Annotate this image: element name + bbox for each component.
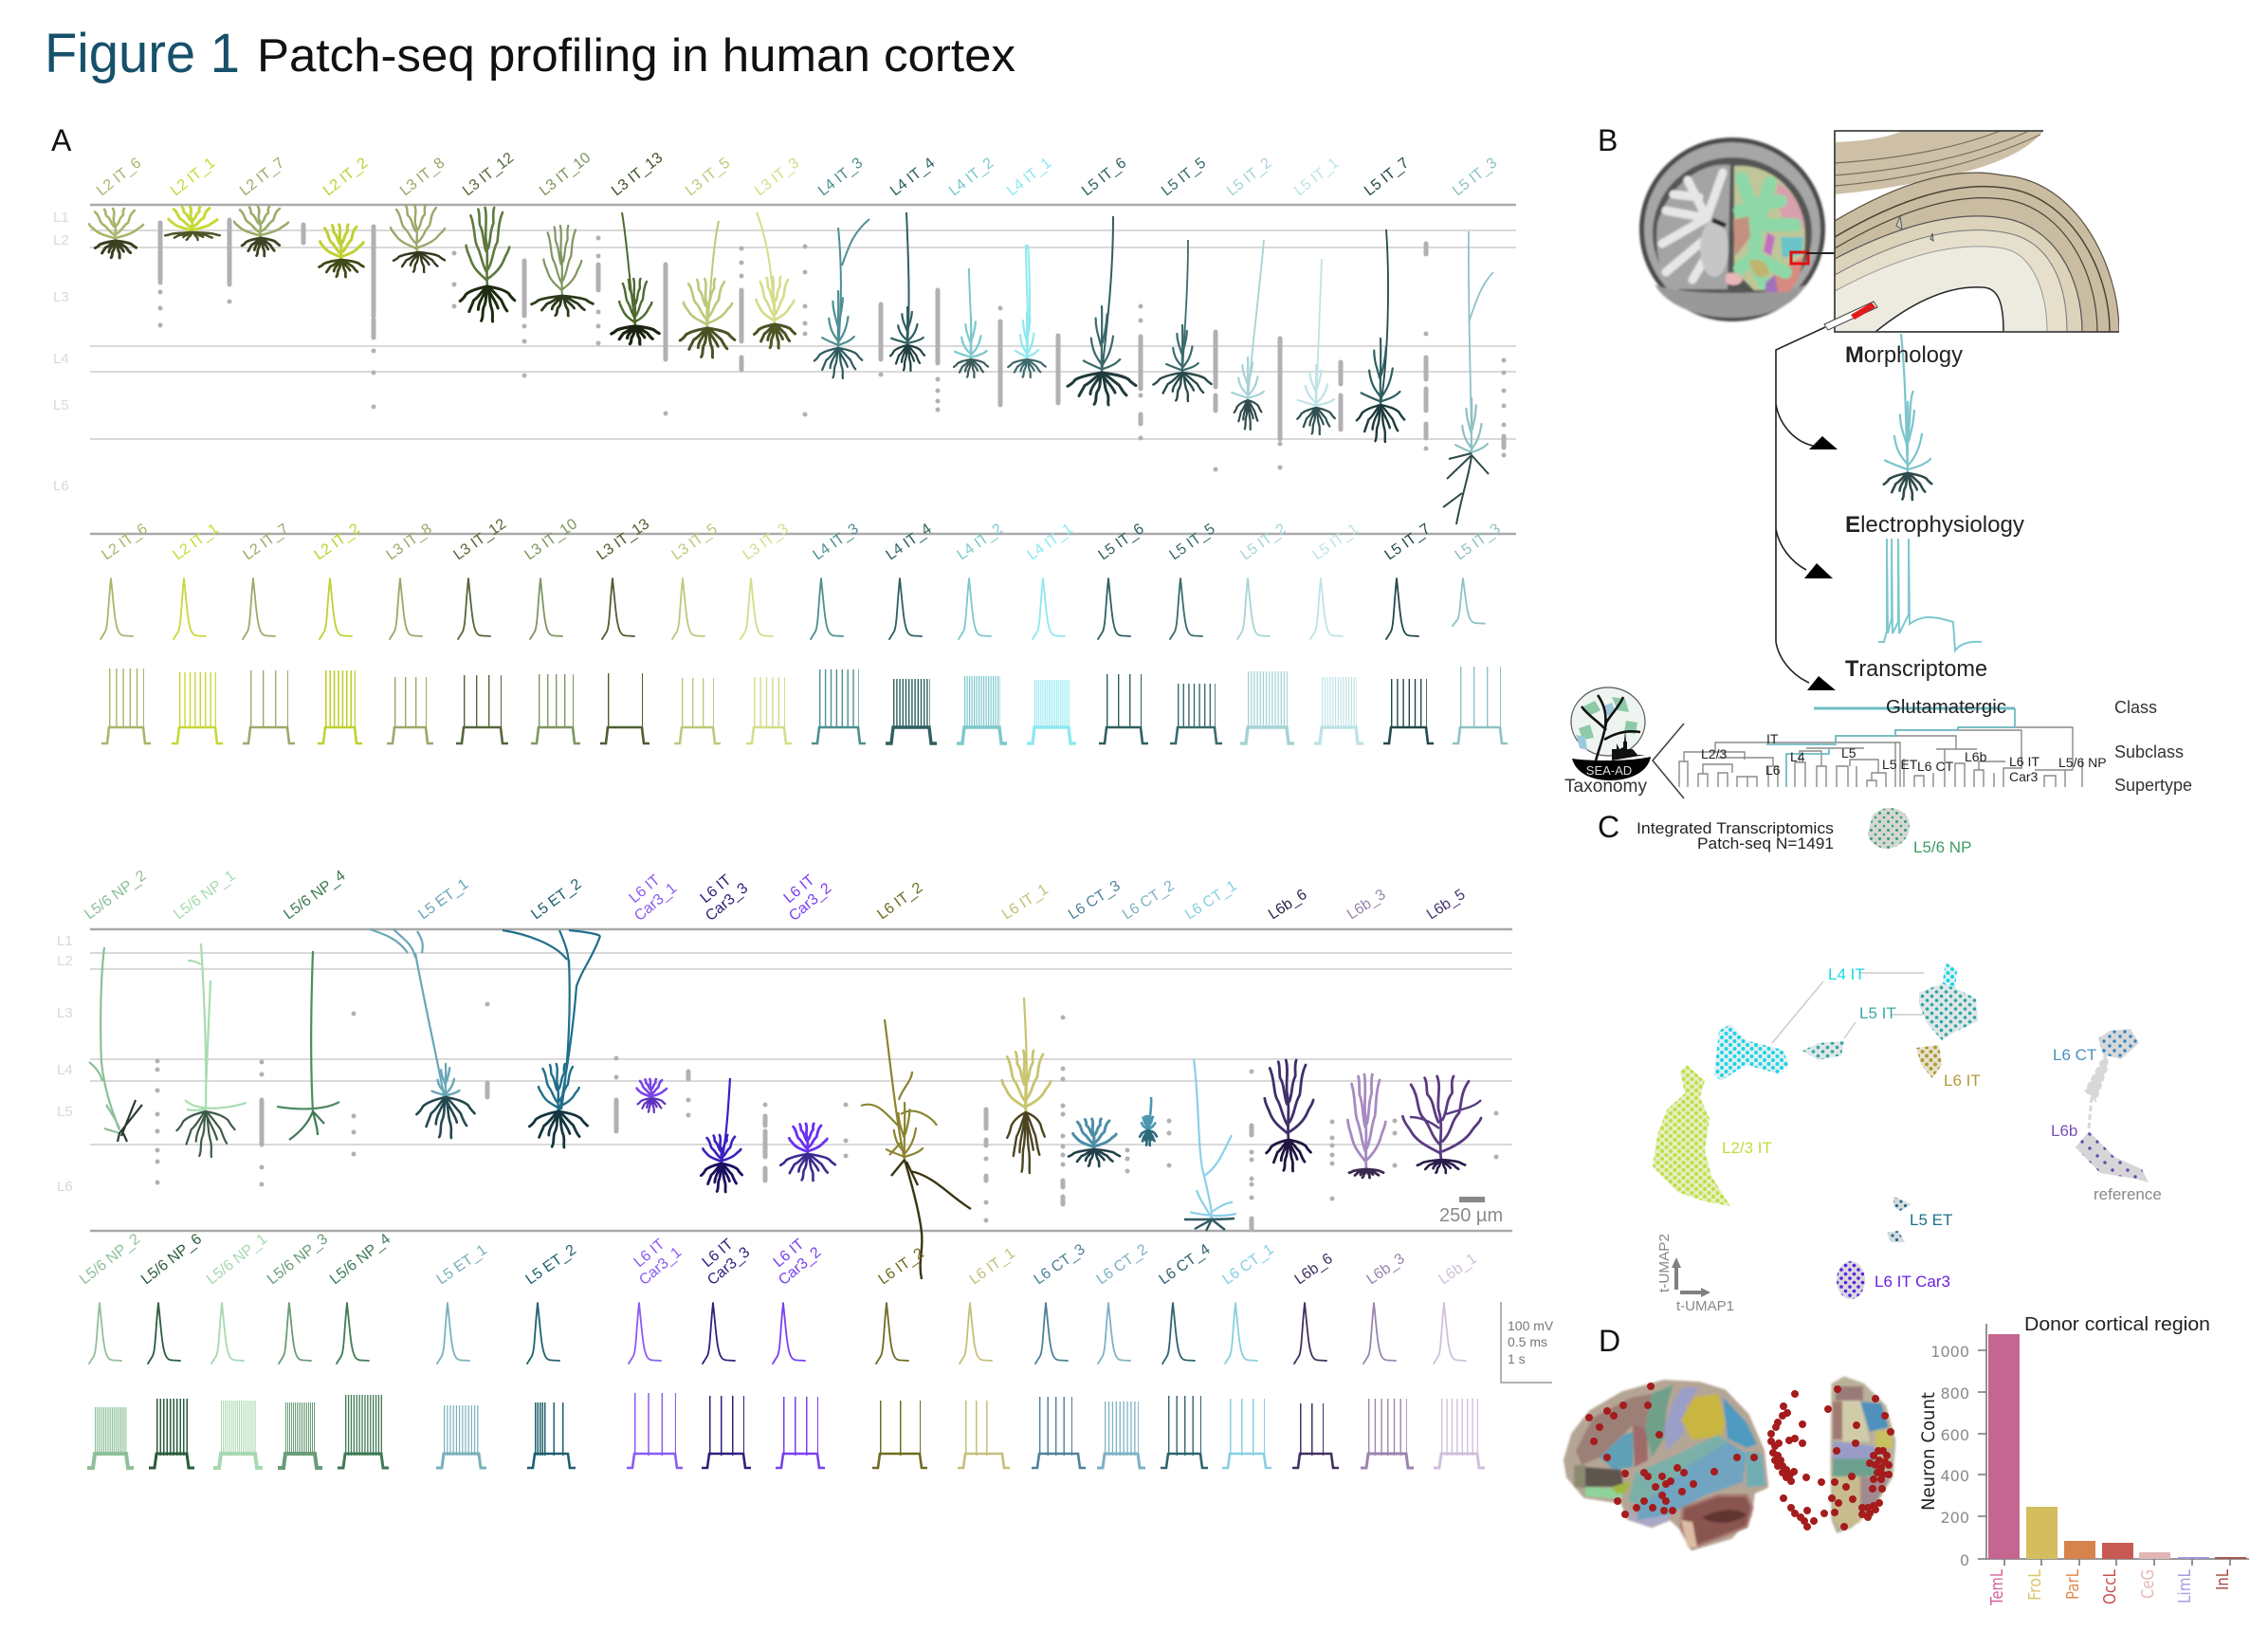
x tick labels: LimL <box>2175 1569 2195 1604</box>
panel A upper: electrophysiology type labels: L5 IT_1 <box>1310 521 1362 563</box>
panel A upper: electrophysiology type labels: L2 IT_6 <box>100 521 151 563</box>
panel C: UMAP axes: t-UMAP1 <box>1676 1298 1734 1314</box>
panel C: cluster labels: L6b <box>2051 1122 2077 1140</box>
panel C: cluster labels <box>1722 838 2162 1291</box>
panel A upper: morphology type labels: L3 IT_12 <box>460 150 517 199</box>
y tick labels: 800 <box>1940 1384 1969 1402</box>
panel A upper: electrophysiology type labels: L5 IT_5 <box>1167 521 1218 563</box>
panel B: coronal brain MRI <box>1639 137 1825 321</box>
panel A lower: electrophysiology type labels: Car3_1 <box>636 1244 685 1289</box>
dendrogram labels: L5 <box>1841 745 1856 761</box>
y axis title: Neuron Count <box>1918 1392 1939 1511</box>
dendrogram labels: IT <box>1766 731 1779 746</box>
y tick labels: 1000 <box>1930 1343 1969 1361</box>
panel A lower: layer names <box>57 933 73 1195</box>
panel A upper: morphology type labels: L5 IT_5 <box>1159 155 1209 199</box>
neuron L6 IT Car3_2 <box>780 1124 835 1181</box>
panel A lower: electrophysiology type labels: Car3_2 <box>776 1244 824 1289</box>
panel A lower: electrophysiology type labels: L6 CT_2 <box>1094 1241 1151 1288</box>
panel A lower: morphology type labels: L6 IT_2 <box>874 880 925 923</box>
electrophysiology scale legend <box>1501 1302 1554 1383</box>
panel A upper: spike trains <box>101 697 1508 743</box>
neuron L2 IT_2 <box>320 225 363 277</box>
panel A lower: electrophysiology type labels <box>77 1231 1480 1289</box>
panel C: cluster labels: L6 CT <box>2053 1046 2096 1064</box>
panel A lower: morphology type labels: L6b_3 <box>1344 887 1389 923</box>
taxonomy level labels: Class <box>2114 698 2157 717</box>
panel A lower: layer lines <box>90 929 1512 1231</box>
x tick labels: ParL <box>2063 1569 2083 1600</box>
panel A upper: electrophysiology type labels: L4 IT_1 <box>1025 521 1076 563</box>
cluster L2/3 IT <box>1653 1065 1730 1206</box>
panel A lower: electrophysiology type labels: L5/6 NP_1 <box>204 1231 270 1288</box>
panel A lower: action potential traces <box>89 1303 1466 1364</box>
panel A upper: morphology type labels: L3 IT_10 <box>537 150 594 199</box>
panel C: cluster labels: L5/6 NP <box>1913 838 1971 856</box>
panel label A: A <box>51 123 72 157</box>
neuron L2 IT_6 <box>89 209 143 258</box>
panel A lower: layer names: L4 <box>57 1062 73 1078</box>
panel B: cortex inset <box>1835 131 2119 332</box>
panel A upper: morphology type labels: L3 IT_8 <box>397 155 448 199</box>
dendrogram labels: L5 ET <box>1882 757 1918 772</box>
panel A lower: morphology type labels: L5/6 NP_4 <box>281 868 349 923</box>
panel A upper: electrophysiology type labels: L5 IT_7 <box>1382 521 1434 563</box>
panel A upper: electrophysiology type labels: L2 IT_1 <box>171 521 222 563</box>
panel A lower: electrophysiology type labels: L5/6 NP_3 <box>265 1231 331 1288</box>
panel C: cluster labels: L6 IT Car3 <box>1875 1273 1950 1291</box>
panel A upper: morphology type labels: L2 IT_2 <box>320 155 371 199</box>
panel A lower: layer names: L3 <box>57 1005 73 1021</box>
panel A lower: electrophysiology type labels: L6 IT_2 <box>876 1245 927 1288</box>
dendrogram labels: L6 IT <box>2009 754 2039 769</box>
panel B: arrow to cortex inset <box>1806 247 1889 262</box>
panel A lower: morphology type labels: L6b_6 <box>1266 887 1310 923</box>
panel A upper: electrophysiology type labels: L5 IT_3 <box>1453 521 1504 563</box>
panel A lower: electrophysiology type labels: L6b_3 <box>1364 1251 1408 1288</box>
taxonomy level labels <box>2114 698 2192 795</box>
panel C: header <box>1637 819 1834 852</box>
title: Patch-seq profiling in human cortex <box>257 30 1015 82</box>
panel A upper: electrophysiology type labels: L3 IT_8 <box>384 521 435 563</box>
panel A upper: electrophysiology type labels: L3 IT_12 <box>451 516 509 563</box>
scale bar 250 um: 250 µm <box>1439 1205 1503 1226</box>
panel B: morphology neuron <box>1884 334 1931 500</box>
panel A upper: electrophysiology type labels: L3 IT_5 <box>669 521 721 563</box>
panel A upper: morphology type labels: L5 IT_2 <box>1224 155 1274 199</box>
panel A upper: morphology type labels: L3 IT_5 <box>683 155 733 199</box>
panel A lower: electrophysiology type labels: L5 ET_1 <box>434 1242 490 1288</box>
panel A lower: morphology type labels: L5 ET_1 <box>415 876 471 923</box>
panel D: recording site dots <box>1589 1386 1891 1527</box>
neuron L5 IT_5 <box>1153 240 1212 401</box>
neuron L6b_5 <box>1402 1076 1481 1173</box>
neuron L4 IT_1 <box>1008 245 1046 377</box>
panel C: UMAP axes <box>1656 1234 1734 1314</box>
panel A upper: layer names: L4 <box>53 351 69 367</box>
panel A lower: electrophysiology type labels: L6 CT_3 <box>1032 1241 1088 1288</box>
panel A upper: morphology type labels <box>94 150 1500 199</box>
neuron L6 CT_2 <box>1140 1097 1157 1145</box>
panel A upper: action potential traces <box>101 578 1485 639</box>
panel A lower: morphology type labels: L6b_5 <box>1424 887 1469 923</box>
panel C: cluster labels: L2/3 IT <box>1722 1139 1772 1157</box>
dendrogram <box>1679 708 2082 787</box>
panel A lower: morphology type labels: L5/6 NP_2 <box>82 868 150 923</box>
neuron L5/6 NP_1 <box>176 944 247 1157</box>
panel A lower: morphology type labels: L6 IT_1 <box>999 881 1052 923</box>
neuron L6 IT Car3_3 <box>701 1078 742 1192</box>
panel A lower: morphology type labels: L6 CT_1 <box>1182 878 1240 923</box>
title: Figure 1 <box>45 23 240 84</box>
panel A lower: electrophysiology type labels: L6 IT <box>700 1236 737 1271</box>
taxonomy wedge <box>1653 724 1684 798</box>
neuron L4 IT_4 <box>890 212 924 371</box>
neuron L2 IT_1 <box>165 207 220 240</box>
panel B: Morphology heading: Morphology <box>1845 342 1963 368</box>
panel A upper: electrophysiology type labels: L4 IT_3 <box>811 521 862 563</box>
panel A upper: soma depth dots <box>160 220 1504 469</box>
cluster L6 IT Car3 <box>1837 1261 1865 1299</box>
neuron L5 ET_2 <box>503 930 600 1147</box>
cluster L6b <box>2076 1131 2149 1182</box>
x tick labels: TemL <box>1987 1569 2007 1606</box>
panel A upper: electrophysiology type labels: L3 IT_10 <box>522 516 580 563</box>
panel A upper: electrophysiology type labels: L2 IT_7 <box>241 521 292 563</box>
panel A upper: morphology type labels: L3 IT_13 <box>609 150 666 199</box>
neuron L5/6 NP_2 <box>89 947 142 1142</box>
panel A upper: electrophysiology type labels: L2 IT_2 <box>312 521 363 563</box>
panel A upper: layer names: L1 <box>53 210 69 226</box>
panel A lower: morphology type labels: L6 IT <box>698 871 735 907</box>
panel label B: B <box>1598 123 1618 157</box>
neuron L5 IT_2 <box>1232 240 1264 430</box>
dendrogram labels: L2/3 <box>1701 746 1727 761</box>
panel D: bar chart Donor cortical region <box>1918 1314 2249 1606</box>
panel A upper: morphology type labels: L4 IT_4 <box>887 155 938 199</box>
panel A lower: morphology type labels: L6 IT <box>627 871 664 907</box>
panel A lower: layer names: L5 <box>57 1104 73 1120</box>
panel A lower: layer names: L2 <box>57 953 73 969</box>
panel A lower: electrophysiology type labels: L6 IT <box>631 1236 668 1271</box>
panel A lower: electrophysiology type labels: L6 CT_1 <box>1220 1241 1277 1288</box>
neuron L3 IT_10 <box>532 226 593 316</box>
neuron L6b_3 <box>1347 1074 1385 1178</box>
panel A upper: layer names: L6 <box>53 478 69 494</box>
neuron L6b_6 <box>1265 1060 1313 1171</box>
neuron L6 IT_2 <box>861 1019 971 1279</box>
panel A lower: morphology type labels: Car3_1 <box>631 880 680 925</box>
panel A upper: electrophysiology type labels <box>100 516 1504 563</box>
neuron L2 IT_7 <box>234 207 288 256</box>
neuron L4 IT_2 <box>954 268 988 377</box>
panel A lower: morphology type labels: L6 CT_2 <box>1120 878 1178 923</box>
neuron L5 IT_7 <box>1357 229 1404 442</box>
panel label C: C <box>1598 810 1619 844</box>
panel B: Transcriptome heading: Transcriptome <box>1845 656 1987 682</box>
dendrogram labels: L4 <box>1790 749 1805 764</box>
Taxonomy label: Taxonomy <box>1564 777 1647 797</box>
neuron L5 IT_3 <box>1443 231 1493 524</box>
x tick labels: InL <box>2213 1569 2233 1590</box>
reference tail <box>2086 1053 2107 1128</box>
panel A upper: electrophysiology type labels: L5 IT_6 <box>1096 521 1147 563</box>
panel A upper: electrophysiology type labels: L5 IT_2 <box>1238 521 1289 563</box>
panel A lower: neuron morphologies <box>89 929 1481 1279</box>
panel A lower: morphology type labels: Car3_3 <box>703 880 751 925</box>
panel A lower: electrophysiology type labels: L6 IT_1 <box>967 1245 1018 1288</box>
panel A upper: neuron morphologies <box>89 205 1493 524</box>
panel A lower: electrophysiology type labels: L5/6 NP_6 <box>138 1231 205 1288</box>
cluster L5/6 NP <box>1868 808 1910 849</box>
dendrogram labels: Glutamatergic <box>1886 697 2006 718</box>
panel A lower: electrophysiology type labels: L6b_6 <box>1292 1251 1336 1288</box>
dendrogram labels <box>1701 697 2107 784</box>
panel C: cluster labels: reference <box>2094 1185 2162 1203</box>
panel C: cluster labels: L5 ET <box>1910 1211 1952 1229</box>
panel A upper: electrophysiology type labels: L3 IT_3 <box>741 521 792 563</box>
title <box>45 23 1015 84</box>
panel A lower: electrophysiology type labels: L5/6 NP_4 <box>327 1231 393 1288</box>
y axis <box>1978 1324 2249 1566</box>
icon: SEA-AD taxonomy tree logo <box>1571 687 1651 780</box>
panel A lower: electrophysiology type labels: L6 CT_4 <box>1157 1241 1214 1288</box>
neuron L3 IT_13 <box>612 212 659 344</box>
panel A lower: layer names: L1 <box>57 933 73 949</box>
cluster L5 ET <box>1887 1197 1911 1242</box>
panel A upper: morphology type labels: L5 IT_1 <box>1291 155 1342 199</box>
dendrogram labels: Car3 <box>2009 769 2039 784</box>
panel A lower: morphology type labels: L6 IT <box>781 871 818 907</box>
panel A upper: morphology type labels: L5 IT_7 <box>1362 155 1412 199</box>
chart title: Donor cortical region <box>2024 1314 2210 1335</box>
cluster L6 CT <box>2098 1029 2139 1059</box>
panel A lower: electrophysiology type labels: Car3_3 <box>704 1244 753 1289</box>
panel C: UMAP clusters <box>1653 808 2149 1299</box>
panel A lower: spike trains <box>87 1424 1485 1468</box>
panel A lower: morphology type labels: L5/6 NP_1 <box>171 868 239 923</box>
neuron L5 IT_1 <box>1297 259 1335 434</box>
x tick labels: FroL <box>2025 1569 2045 1601</box>
panel D: dorsal brain <box>1832 1378 1894 1531</box>
panel A upper: morphology type labels: L2 IT_7 <box>237 155 287 199</box>
panel A upper: layer names <box>53 210 69 494</box>
x tick labels <box>1987 1569 2233 1606</box>
neuron L5/6 NP_4 <box>277 951 339 1140</box>
dendrogram labels: L6 CT <box>1917 759 1954 774</box>
electrophysiology scale legend: 0.5 ms <box>1508 1334 1547 1349</box>
panel A lower: electrophysiology type labels: L6 IT <box>771 1236 808 1271</box>
y tick labels: 200 <box>1940 1509 1969 1527</box>
panel A upper: layer lines <box>90 205 1516 534</box>
panel label D: D <box>1599 1324 1620 1358</box>
y tick labels: 0 <box>1960 1551 1969 1569</box>
icon: SEA-AD taxonomy tree logo: SEA-AD <box>1586 763 1632 778</box>
neuron L3 IT_12 <box>460 208 515 321</box>
panel B: Electrophysiology heading: Electrophysiology <box>1845 512 2024 538</box>
neuron L6 IT Car3_1 <box>637 1079 667 1112</box>
panel C: UMAP axes: t-UMAP2 <box>1656 1234 1673 1292</box>
panel A lower: electrophysiology type labels: L6b_1 <box>1436 1251 1480 1288</box>
panel A upper: layer names: L2 <box>53 232 69 248</box>
panel A lower: electrophysiology type labels: L5/6 NP_2 <box>77 1231 143 1288</box>
panel A upper: electrophysiology type labels: L4 IT_2 <box>955 521 1006 563</box>
panel A lower: electrophysiology type labels: L5 ET_2 <box>523 1242 579 1288</box>
dendrogram labels: L6 <box>1765 762 1781 778</box>
neuron L5 ET_1 <box>370 929 475 1138</box>
neuron L6 IT_1 <box>1002 998 1051 1173</box>
cluster L5 IT small <box>1802 1041 1844 1060</box>
panel B: cortex inset frame <box>1835 131 2119 332</box>
dendrogram labels: L6b <box>1965 749 1987 764</box>
panel A upper: morphology type labels: L5 IT_3 <box>1450 155 1500 199</box>
x tick labels: CeG <box>2138 1569 2158 1599</box>
panel A lower: soma depth dots <box>157 1004 1496 1230</box>
electrophysiology scale legend: 100 mV <box>1508 1318 1554 1333</box>
taxonomy level labels: Subclass <box>2114 742 2184 761</box>
panel A upper: morphology type labels: L4 IT_2 <box>946 155 997 199</box>
neuron L4 IT_3 <box>814 219 869 378</box>
neuron L5 IT_6 <box>1068 216 1136 405</box>
panel B: branching arrows <box>1776 327 1838 690</box>
panel A upper: electrophysiology type labels: L3 IT_13 <box>594 516 652 563</box>
panel A lower: morphology type labels: L5 ET_2 <box>528 876 584 923</box>
y tick labels: 400 <box>1940 1467 1969 1485</box>
neuron L3 IT_8 <box>391 205 445 272</box>
cluster L5 IT large <box>1919 983 1978 1040</box>
panel A upper: layer names: L3 <box>53 289 69 305</box>
neuron L6 CT_3 <box>1069 1119 1120 1166</box>
panel A upper: morphology type labels: L5 IT_6 <box>1079 155 1129 199</box>
panel C: header: Integrated Transcriptomics <box>1637 819 1834 837</box>
cluster L4 IT right <box>1942 962 1957 989</box>
panel B: recording pipette <box>1824 302 1877 330</box>
panel D: lateral brain <box>1566 1383 1765 1548</box>
panel A upper: morphology type labels: L2 IT_6 <box>94 155 144 199</box>
panel A lower: morphology type labels: L6 CT_3 <box>1066 878 1124 923</box>
dendrogram labels: L5/6 NP <box>2058 755 2107 770</box>
neuron L3 IT_5 <box>680 221 735 357</box>
bars <box>1988 1334 2246 1559</box>
y tick labels <box>1930 1343 1969 1569</box>
panel B: example spike trace <box>1878 539 1982 651</box>
taxonomy level labels: Supertype <box>2114 776 2192 795</box>
panel C: header: Patch-seq N=1491 <box>1697 834 1834 852</box>
panel A upper: layer names: L5 <box>53 397 69 413</box>
panel C: cluster labels: L6 IT <box>1944 1072 1981 1090</box>
panel A upper: morphology type labels: L4 IT_1 <box>1004 155 1054 199</box>
cluster L6 IT <box>1916 1045 1942 1078</box>
panel A upper: morphology type labels: L4 IT_3 <box>815 155 866 199</box>
electrophysiology scale legend: 1 s <box>1508 1351 1526 1366</box>
y tick labels: 600 <box>1940 1426 1969 1444</box>
panel A upper: morphology type labels: L3 IT_3 <box>752 155 802 199</box>
x tick labels: OccL <box>2100 1569 2120 1604</box>
panel A lower: layer names: L6 <box>57 1179 73 1195</box>
panel C: cluster labels: L5 IT <box>1859 1004 1896 1022</box>
panel C: leader lines <box>1772 973 1924 1043</box>
neuron L3 IT_3 <box>754 212 796 348</box>
panel A upper: electrophysiology type labels: L4 IT_4 <box>884 521 935 563</box>
panel C: cluster labels: L4 IT <box>1828 965 1865 983</box>
panel A lower: morphology type labels <box>82 867 1469 925</box>
panel A upper: morphology type labels: L2 IT_1 <box>168 155 218 199</box>
panel A lower: morphology type labels: Car3_2 <box>786 880 834 925</box>
cluster L4 IT left <box>1714 1024 1789 1081</box>
neuron L6 CT_1 <box>1184 1059 1236 1231</box>
